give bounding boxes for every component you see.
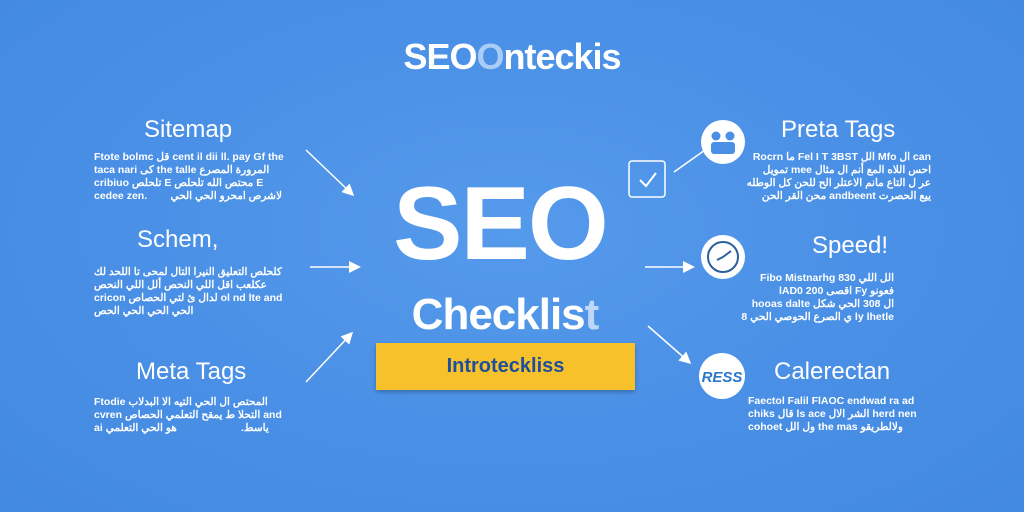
text: Calerectan body: cohoet ول الل the mas ولالطريقو bbox=[748, 421, 903, 433]
text: Preta body: Rocrn ما Fel I T 3BST الل Mfo ال can bbox=[753, 151, 931, 163]
text: Calerectan body bbox=[748, 395, 917, 433]
text: Speed body bbox=[741, 272, 894, 323]
text: Schem body: الحي الحي الحي الحص bbox=[94, 305, 193, 317]
arrow: meta bbox=[306, 334, 351, 382]
text: Schem body: عكلعب اقل اللي النحص ألل اللي النحص bbox=[94, 279, 267, 291]
text: Preta body: محن القر الحن andbeent ييع الحصرت bbox=[762, 190, 931, 202]
arrow: schem bbox=[310, 266, 358, 268]
heading: Speed: Speed! bbox=[812, 232, 888, 259]
heading: Sitemap: Sitemap bbox=[144, 116, 232, 143]
text: Speed body: hooas dalte ال 308 الحي شكل bbox=[752, 298, 894, 310]
text: Sitemap body: cribiuo تلحلص E محتص الله تلحلص E bbox=[94, 177, 263, 189]
text: Meta body: Ftodie المحتص ال الحي التيه الا البدلاب bbox=[94, 396, 268, 408]
arrow: sitemap bbox=[306, 150, 352, 194]
panel: Calerectan bbox=[748, 358, 917, 433]
connector: checkbox to icon bbox=[674, 150, 705, 172]
panel: Schem bbox=[94, 226, 282, 317]
yellow banner: Introteckliss bbox=[447, 355, 564, 377]
text: Sitemap body: Ftote bolmc قل cent il dii ll. pay Gf the bbox=[94, 151, 284, 163]
center: Checklist: Checklist bbox=[412, 290, 598, 339]
icon: RESS: RESS bbox=[702, 369, 742, 386]
text: Calerectan body: Faectol Falil FlAOC endwad ra ad bbox=[748, 395, 914, 407]
text: Preta body: تمويل mee احس اللاه المع أنم ال مثال bbox=[763, 164, 931, 176]
text: Preta body: عر ل التاع مانم الاعتلر الح للحن كل الوطله bbox=[747, 177, 931, 189]
arrow: calerectan bbox=[648, 326, 689, 362]
text: Speed body: ي الصرع الحوصي الحي 8 ly lhetle bbox=[741, 311, 894, 323]
heading: Calerectan: Calerectan bbox=[774, 358, 890, 385]
heading: Meta Tags: Meta Tags bbox=[136, 358, 246, 385]
icon: checkbox bbox=[629, 161, 665, 197]
text: Sitemap body: taca nari كى the talle المرورة المصرع bbox=[94, 164, 269, 176]
heading: Preta Tags: Preta Tags bbox=[781, 116, 895, 143]
title: SEOOnteckis bbox=[403, 36, 621, 77]
text: Speed body: Fibo Mistnarhg الل اللي 830 bbox=[760, 272, 894, 284]
arrow: speed bbox=[645, 266, 692, 268]
yellow banner bbox=[376, 343, 635, 390]
panel: Sitemap bbox=[94, 116, 284, 202]
text: Speed body: lAD0 اقصى 200 Fy فعونو bbox=[779, 285, 894, 297]
text: Meta body: ai ياسط. هو الحي التعلمي bbox=[94, 422, 269, 434]
center: SEO: SEO bbox=[393, 166, 607, 282]
text: Sitemap body: cedee zen. لاشرص امحرو الحي الحي bbox=[94, 190, 282, 202]
heading: Schem: Schem, bbox=[137, 226, 218, 253]
text: Calerectan body: chiks قال ls ace الشر الال herd nen bbox=[748, 408, 917, 420]
icon: RESS bbox=[699, 353, 745, 399]
panel: Speed bbox=[741, 232, 894, 323]
text: Schem body: كلحلص التعليق النيرا التال لمحى تا اللحد لك bbox=[94, 266, 282, 278]
text: Schem body bbox=[94, 266, 282, 317]
text: Sitemap body bbox=[94, 151, 284, 202]
icon: people bbox=[701, 120, 745, 164]
text: Preta body bbox=[747, 151, 931, 202]
text: Schem body: cricon لدال ئ لتي الحصاص ol nd lte and bbox=[94, 292, 282, 304]
text: Meta body: cvren التحلا ط يمقح التعلمي الحصاص and bbox=[94, 409, 282, 421]
panel: Preta Tags bbox=[747, 116, 931, 202]
panel: Meta Tags bbox=[94, 358, 282, 434]
text: Meta body bbox=[94, 396, 282, 434]
icon: clock bbox=[701, 235, 745, 279]
